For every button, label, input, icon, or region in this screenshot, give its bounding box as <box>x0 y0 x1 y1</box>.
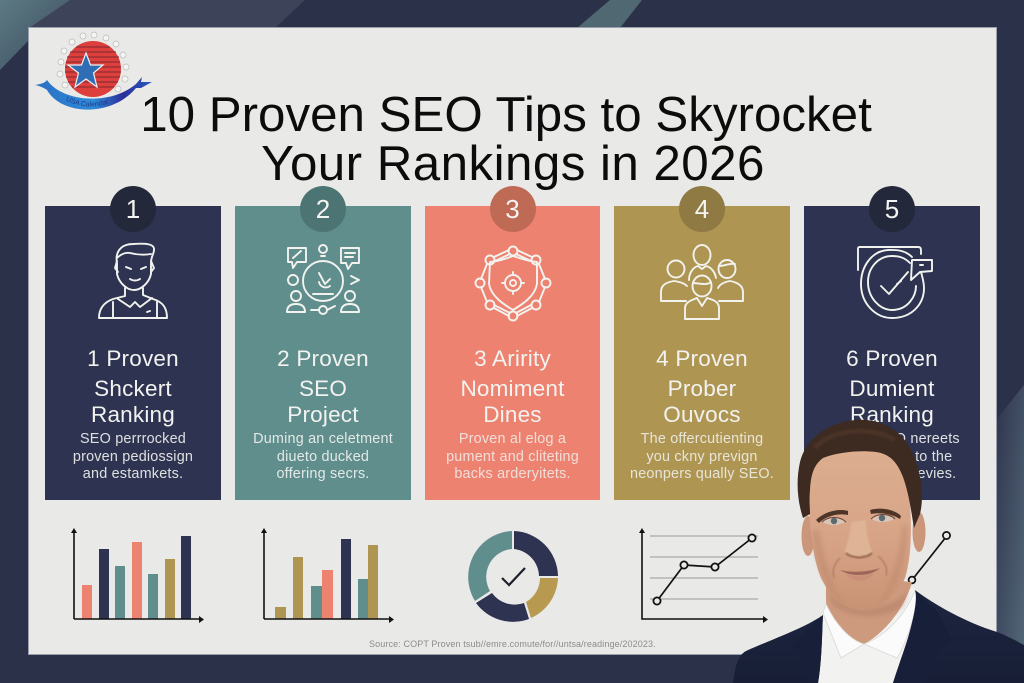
face shading <box>812 530 846 606</box>
face <box>809 446 911 610</box>
panel: card 5 <box>804 206 980 500</box>
card 1 heading: Ranking <box>91 402 175 427</box>
card 2 text: offering secrs. <box>276 466 370 482</box>
card 2 heading: SEO <box>299 376 347 401</box>
number badge 3 <box>490 186 536 232</box>
icon: shield <box>474 246 552 322</box>
bar chart 2 <box>261 528 394 623</box>
card 3 text: Proven al elog a <box>459 431 566 447</box>
number badge 2: 2 <box>316 194 330 224</box>
card 4 heading <box>656 346 748 427</box>
panel: card 3 <box>425 206 600 500</box>
mouth <box>840 568 880 575</box>
number badge 1 <box>110 186 156 232</box>
collar <box>823 604 864 658</box>
title <box>140 87 872 191</box>
lapels <box>790 615 823 683</box>
card 4 heading: Ouvocs <box>663 402 741 427</box>
card 1 text: and estamkets. <box>83 466 183 482</box>
card 3 text: backs arderyitets. <box>454 466 571 482</box>
icon: team <box>660 244 744 320</box>
card 1 heading: Shckert <box>94 376 172 401</box>
card 1 text: SEO perrrocked <box>80 431 186 447</box>
card 2 text: Duming an celetment <box>253 431 393 447</box>
logo <box>35 32 152 110</box>
card 2 heading: Project <box>287 402 359 427</box>
card 3 heading: Nomiment <box>460 376 565 401</box>
card 3 heading: 3 Aririty <box>474 346 551 371</box>
title: 10 Proven SEO Tips to Skyrocket <box>140 87 872 142</box>
card 5 heading: Dumient <box>849 376 935 401</box>
presenter portrait <box>733 420 1024 683</box>
nose <box>845 520 872 556</box>
card 1 text <box>73 431 193 482</box>
brows <box>816 510 848 523</box>
card 3 text <box>446 431 579 482</box>
number badge 5 <box>869 186 915 232</box>
card 4 text <box>630 431 774 482</box>
icon: network <box>286 244 360 315</box>
line chart 2 <box>908 531 951 584</box>
card 5 heading <box>846 346 938 427</box>
card 4 heading: 4 Proven <box>656 346 748 371</box>
card 4 text: The offercutienting <box>641 431 763 447</box>
number badge 4 <box>679 186 725 232</box>
card 2 heading: 2 Proven <box>277 346 369 371</box>
card 2 heading <box>277 346 369 427</box>
card 5 text: proven links to the <box>832 448 952 464</box>
panel: card 1 <box>45 206 221 500</box>
number badge 3: 3 <box>505 194 520 224</box>
card 3 heading <box>460 346 565 427</box>
card 4 heading: Prober <box>668 376 736 401</box>
line chart 1 <box>639 528 768 623</box>
number badge 4: 4 <box>695 194 709 224</box>
card 2 text <box>253 431 393 482</box>
icon: person <box>98 242 168 319</box>
card 1 heading <box>87 346 179 427</box>
icon: target check <box>857 246 933 319</box>
card 5 text: Proven SEO nereets <box>824 431 960 447</box>
card 2 text: diueto ducked <box>277 448 369 464</box>
card 3 text: pument and cliteting <box>446 448 579 464</box>
neck <box>826 575 912 644</box>
card 4 text: you ckny prevign <box>646 448 758 464</box>
logo: USA Calendar <box>66 96 108 107</box>
card 5 text <box>824 431 960 482</box>
hair <box>798 420 922 528</box>
smile lines <box>833 556 887 578</box>
card 1 heading: 1 Proven <box>87 346 179 371</box>
card 5 heading: Ranking <box>850 402 934 427</box>
shirt <box>818 588 918 683</box>
card 5 text: and ranking devies. <box>828 466 956 482</box>
card 3 heading: Dines <box>483 402 542 427</box>
source note: Source: COPT Proven tsub//emre.comute/for//untsa/readinge/202023. <box>369 639 656 649</box>
card 4 text: neonpers qually SEO. <box>630 466 774 482</box>
title: Your Rankings in 2026 <box>261 136 765 191</box>
card 1 text: proven pediossign <box>73 448 193 464</box>
bar chart 1 <box>71 528 204 623</box>
panel: card 4 <box>614 206 790 500</box>
suit <box>733 590 1024 683</box>
donut chart <box>468 531 558 622</box>
eyes <box>823 518 845 525</box>
number badge 5: 5 <box>885 194 899 224</box>
number badge 2 <box>300 186 346 232</box>
panel: card 2 <box>235 206 411 500</box>
card 5 heading: 6 Proven <box>846 346 938 371</box>
ears <box>802 516 814 556</box>
number badge 1: 1 <box>126 194 140 224</box>
